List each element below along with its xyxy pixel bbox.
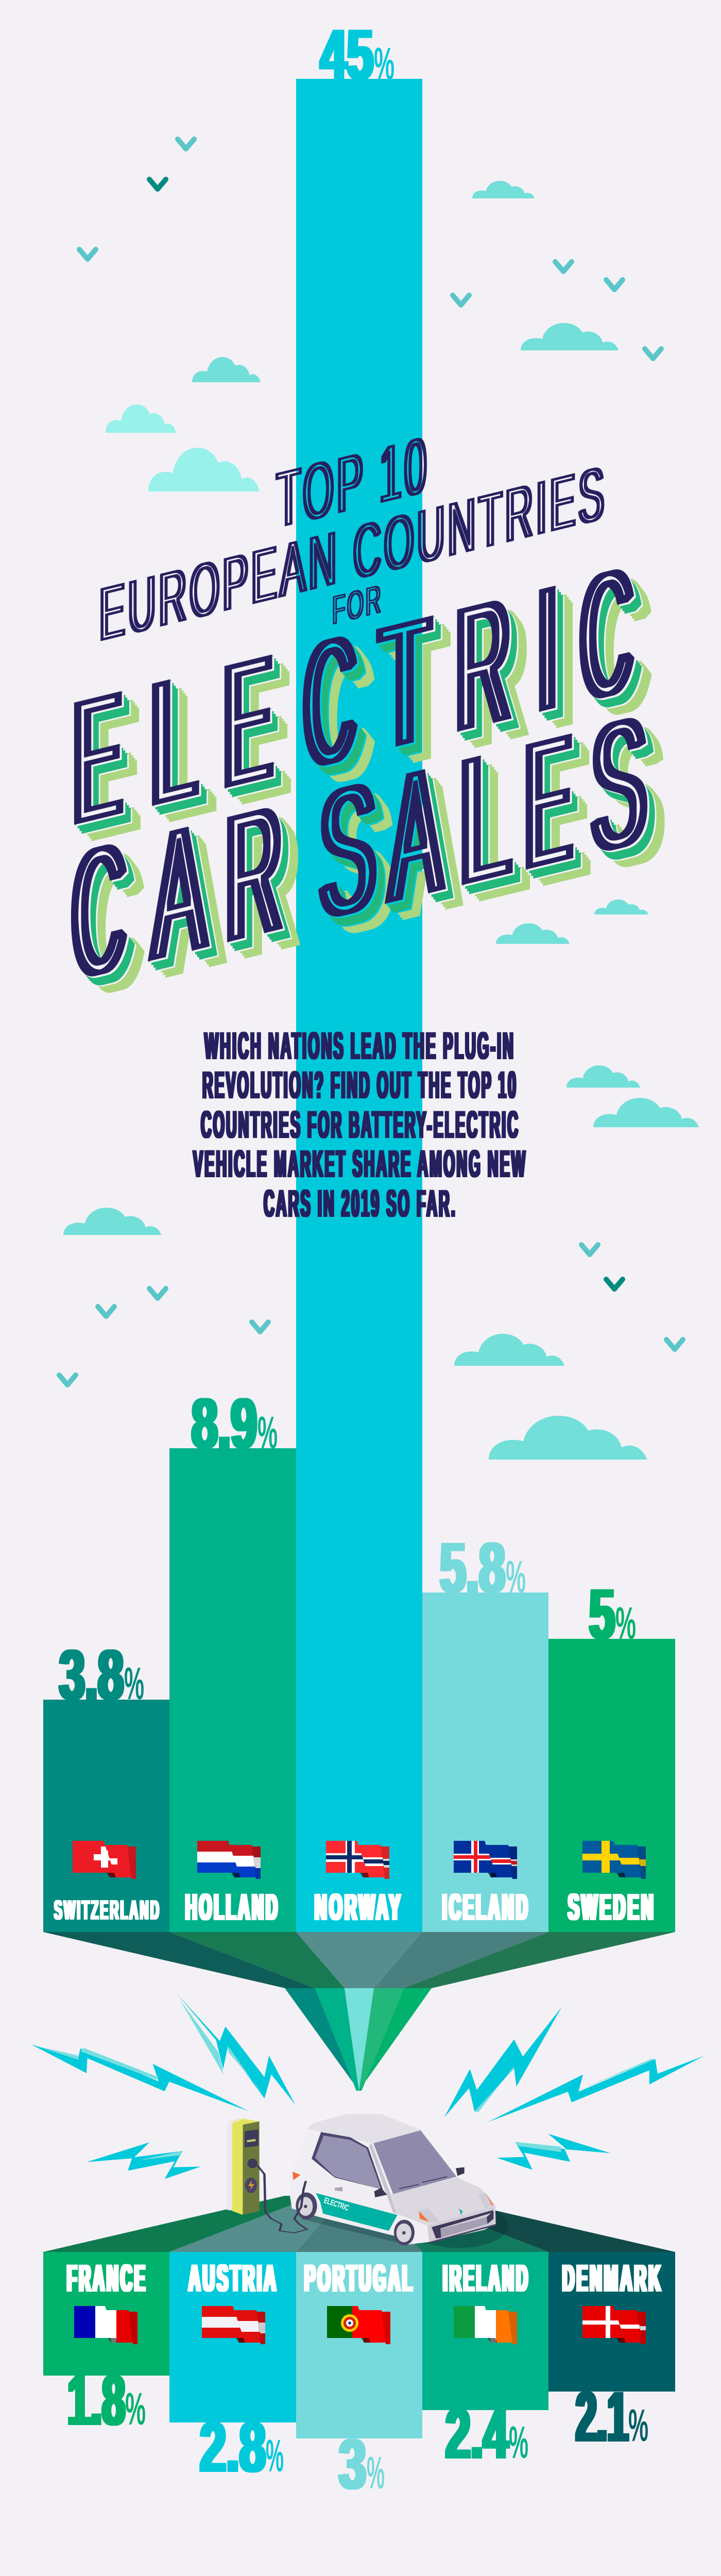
bar: Denmark xyxy=(548,2252,675,2456)
icon: flag Norway xyxy=(326,1841,390,1879)
roof above lower bars xyxy=(43,2196,675,2252)
value: 45%: 45 xyxy=(320,15,373,94)
value: 2.1%: 2.1 xyxy=(576,2378,628,2456)
title line: Electric: L xyxy=(150,635,197,843)
bar: Switzerland: % xyxy=(124,1658,144,1709)
bar: Holland xyxy=(169,1384,296,1932)
title line: Electric: I xyxy=(539,548,556,749)
title line: Electric: E xyxy=(224,617,271,825)
charging station xyxy=(227,2118,260,2215)
funnel: pointed tip xyxy=(285,1988,432,2091)
text: PORTUGAL xyxy=(304,2258,415,2299)
bar: Denmark: % xyxy=(628,2400,648,2451)
value: 5.8%: 5.8 xyxy=(440,1529,505,1607)
title line: Electric: E xyxy=(74,654,121,862)
bar: Portugal xyxy=(296,2252,422,2504)
icon: flag France xyxy=(74,2306,139,2344)
bar: France: FRANCE xyxy=(67,2258,147,2299)
bar: Holland: % xyxy=(258,1407,278,1458)
title line: Electric: C xyxy=(581,530,632,739)
value: 3%: 3 xyxy=(339,2425,366,2504)
icon: flag Austria xyxy=(202,2306,266,2344)
lightning bolts xyxy=(31,1994,705,2179)
title line: Car Sales xyxy=(73,676,646,1018)
bar: Iceland: % xyxy=(506,1551,526,1602)
charging cable xyxy=(258,2165,307,2233)
title line: Electric xyxy=(74,530,632,862)
bar: Ireland: IRELAND xyxy=(443,2258,530,2299)
clouds xyxy=(63,181,699,1460)
bar: Norway 45% xyxy=(296,15,422,1932)
value: 1.8%: % xyxy=(125,2383,146,2434)
value: 2.8%: 2.8 xyxy=(200,2408,266,2487)
bar: Austria xyxy=(169,2252,296,2487)
value: 5%: % xyxy=(615,1598,636,1649)
title line: Car Sales: E xyxy=(525,695,571,908)
icon: flag Iceland xyxy=(454,1841,518,1879)
title line: Car Sales: S xyxy=(592,676,646,891)
bar: Austria: % xyxy=(266,2430,284,2481)
funnel: underside of upper bars xyxy=(43,1932,675,1988)
title line: Car Sales: L xyxy=(459,710,510,924)
title line: Car Sales: S xyxy=(320,743,375,958)
bar: France xyxy=(43,2252,170,2440)
value: 2.4%: 2.4 xyxy=(445,2395,508,2473)
title line: Car Sales: C xyxy=(73,804,125,1018)
title line: Car Sales: R xyxy=(226,766,281,981)
text: NORWAY xyxy=(315,1887,403,1928)
title line: Electric: C xyxy=(304,597,355,806)
bar: Ireland xyxy=(422,2252,548,2473)
title line: Car Sales: A xyxy=(153,785,205,998)
title line: Electric: T xyxy=(380,579,430,788)
bar: Iceland xyxy=(422,1529,548,1932)
value: 5%: 5 xyxy=(589,1575,615,1654)
icon: flag Switzerland xyxy=(73,1841,137,1879)
bar: Ireland: % xyxy=(509,2417,528,2468)
icon: flag Denmark xyxy=(582,2306,647,2344)
car door text: ELECTRIC xyxy=(323,2196,350,2213)
title line: Top 10: TOP 10 xyxy=(277,419,430,545)
birds xyxy=(59,139,683,1385)
title xyxy=(73,419,646,1018)
icon: flag Ireland xyxy=(454,2306,518,2344)
title line: Car Sales: A xyxy=(390,727,441,941)
bar: Switzerland xyxy=(43,1636,170,1932)
value: 1.8%: 1.8 xyxy=(67,2361,125,2440)
icon: flag Holland xyxy=(197,1841,262,1879)
bar: Iceland: ICELAND xyxy=(442,1887,530,1928)
bar: Holland: HOLLAND xyxy=(185,1887,280,1928)
title line: For: FOR xyxy=(332,577,383,633)
value: 8.9%: 8.9 xyxy=(192,1384,257,1463)
intro text xyxy=(193,1025,527,1225)
bar: Portugal: % xyxy=(367,2447,385,2498)
text: SWITZERLAND xyxy=(54,1895,161,1925)
bar: Sweden xyxy=(548,1575,675,1932)
icon: flag Portugal xyxy=(327,2306,391,2344)
value: 3.8%: 3.8 xyxy=(59,1636,124,1715)
electric car xyxy=(289,2114,508,2248)
bar: Austria: AUSTRIA xyxy=(188,2258,278,2299)
title line: Electric: R xyxy=(456,560,510,769)
icon: flag Sweden xyxy=(582,1841,647,1879)
value: 45%: % xyxy=(374,38,394,89)
